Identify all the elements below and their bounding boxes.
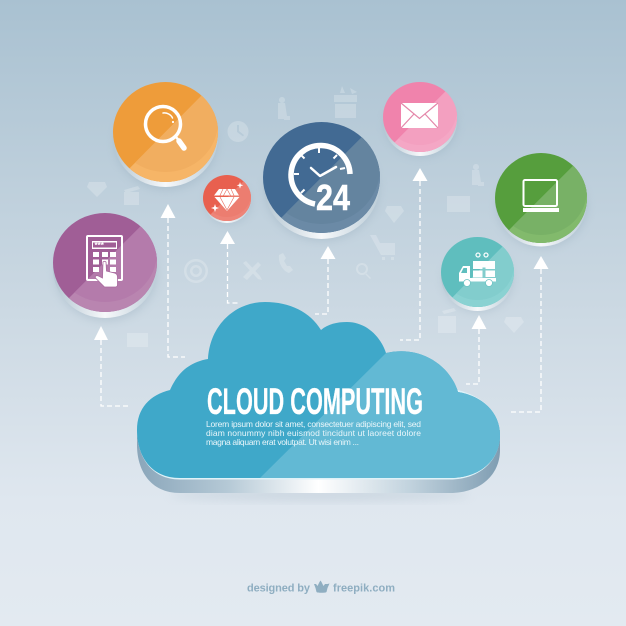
faint icon: person [472,164,484,186]
badge: magnifier (orange) [113,79,218,189]
footer credit: freepik.com [333,582,395,594]
arrowhead [94,326,108,340]
badge: laptop (green) [495,152,587,247]
faint icon: diamond [87,182,107,197]
cloud 3D edge [137,430,500,493]
icon: truck [459,253,496,286]
clock label: 24 [316,177,350,218]
faint icon: gift [438,308,456,333]
faint icon: clock [228,121,249,142]
body text: diam nonummy nibh euismod tincidunt ut laoreet dolore [206,428,421,438]
cloud face [137,302,500,478]
arrowhead [412,168,428,181]
footer credit: designed by [247,582,311,594]
dashed connector: blue [315,246,336,314]
faint icon: diamond [385,206,404,223]
arrowhead [472,315,486,329]
body text [206,419,421,447]
badge: delivery truck (teal) [441,235,514,311]
icon: laptop [523,180,559,212]
cloud light diagonal [260,351,500,478]
body text: magna aliquam erat volutpat. Ut wisi enim ... [206,437,359,447]
icon: envelope [401,103,438,128]
dashed connector: orange [160,204,185,357]
body text: Lorem ipsum dolor sit amet, consectetuer adipiscing elit, sed [206,419,421,429]
badge: calculator (purple) [53,210,157,320]
arrowhead [534,256,548,269]
icon: crown logo [314,580,330,593]
faint icon: diamond [504,317,524,333]
faint background icons [87,86,524,347]
badge: 24 hour clock (blue) [263,119,380,240]
faint icon: cart [370,235,395,260]
faint icon: envelope [127,333,148,347]
arrowhead [320,246,336,259]
title: CLOUD COMPUTING [207,381,423,422]
faint icon: phone [279,253,293,273]
dashed connector: pink [400,168,428,340]
cloud shadow [170,489,470,501]
dashed connector: purple [94,326,128,406]
badge: envelope (pink) [383,80,457,156]
cloud face edge highlight [137,390,500,480]
dashed connector: teal [466,315,486,384]
badge: diamond (red) [203,174,251,223]
dashed connector: green [508,256,548,412]
faint icon: envelope [447,196,470,212]
faint icon: gift [124,186,140,205]
cloud [137,302,510,501]
arrowhead [220,231,235,244]
icon: calculator with hand: *** [94,241,105,250]
icon: diamond [211,182,243,212]
faint icon: tools [243,261,262,280]
dashed connector: red [220,231,238,303]
faint icon: target [184,259,208,283]
arrowhead [160,204,176,218]
icon: magnifier [146,106,184,148]
footer credit [247,580,395,594]
faint icon: gift large [334,86,357,118]
faint icon: magnifier [356,263,371,279]
faint icon: person [278,97,290,120]
